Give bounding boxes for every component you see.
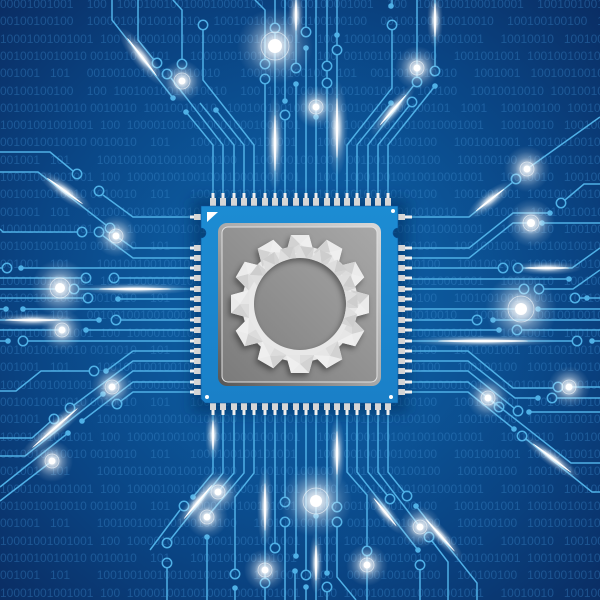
metal plate [218, 223, 381, 386]
chip body [201, 206, 398, 403]
circuit traces: right [412, 117, 600, 492]
gear icon [231, 235, 369, 373]
circuit traces: bottom [150, 415, 477, 600]
binary code pattern: 001001 101 00100100100100010010 1000100100100 101 0010010010010 1001001 100100100100 [0, 308, 600, 322]
binary code pattern: 001001 101 00100100100100010010 1000100100100 101 0010010010010 1001001 100100100100 [0, 66, 600, 80]
circuit traces: top [112, 0, 440, 193]
chip shadow [192, 198, 408, 414]
binary code pattern: 001001 101 00100100100100010010 1000100100100 101 0010010010010 1001001 100100100100 [0, 205, 600, 219]
chip pins [190, 193, 412, 415]
circuit traces: left [0, 152, 190, 501]
